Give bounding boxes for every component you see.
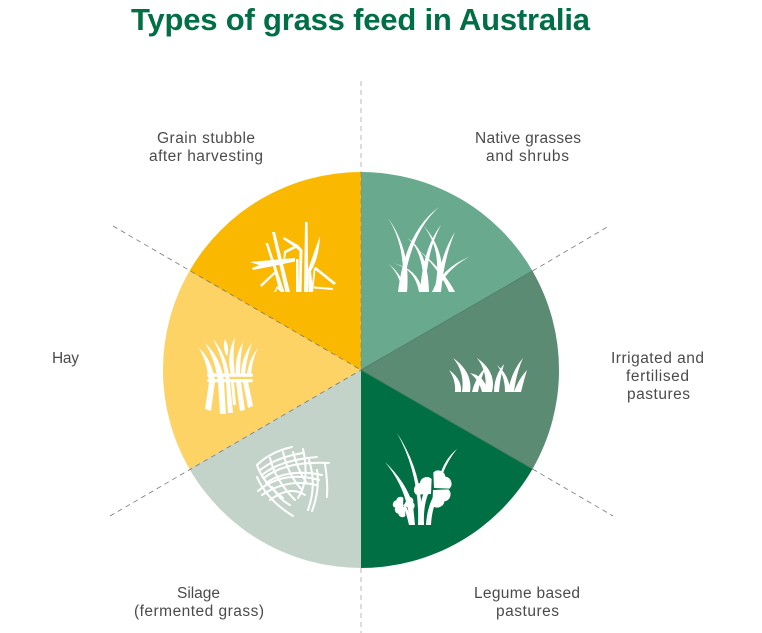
segment: native grasses — [361, 172, 532, 370]
title: Types of grass feed in Australia — [131, 2, 591, 37]
segment: grain stubble — [190, 172, 361, 370]
label: grain stubble: Grain stubble — [157, 130, 255, 147]
segment: hay — [163, 271, 361, 469]
icon: native grasses — [388, 207, 469, 292]
label: irrigated pastures: pastures — [627, 386, 690, 403]
label: irrigated pastures — [611, 350, 704, 403]
segment: legume pastures — [361, 370, 532, 568]
icon: hay sheaf — [199, 337, 258, 414]
pie chart — [163, 172, 559, 568]
icon: silage lattice — [257, 447, 329, 516]
label: hay: Hay — [52, 350, 79, 367]
label: irrigated pastures: fertilised — [626, 368, 689, 385]
segment: silage — [190, 370, 361, 568]
icon: grain stubble — [250, 222, 336, 292]
label: grain stubble — [149, 130, 263, 165]
segment: irrigated pastures — [361, 271, 559, 469]
label: native grasses: Native grasses — [475, 130, 581, 147]
label: native grasses: and shrubs — [486, 148, 569, 165]
label: silage: (fermented grass) — [134, 603, 264, 620]
icon: irrigated pastures — [449, 358, 527, 392]
label: native grasses — [475, 130, 581, 165]
dashed divider lines — [110, 81, 613, 633]
label: silage — [134, 585, 264, 620]
label: silage: Silage — [177, 585, 220, 602]
label: legume pastures: Legume based — [474, 585, 580, 602]
label: grain stubble: after harvesting — [149, 148, 263, 165]
label: irrigated pastures: Irrigated and — [611, 350, 704, 367]
icon: clover legume — [385, 433, 457, 525]
label: legume pastures: pastures — [496, 603, 559, 620]
label: legume pastures — [474, 585, 580, 620]
